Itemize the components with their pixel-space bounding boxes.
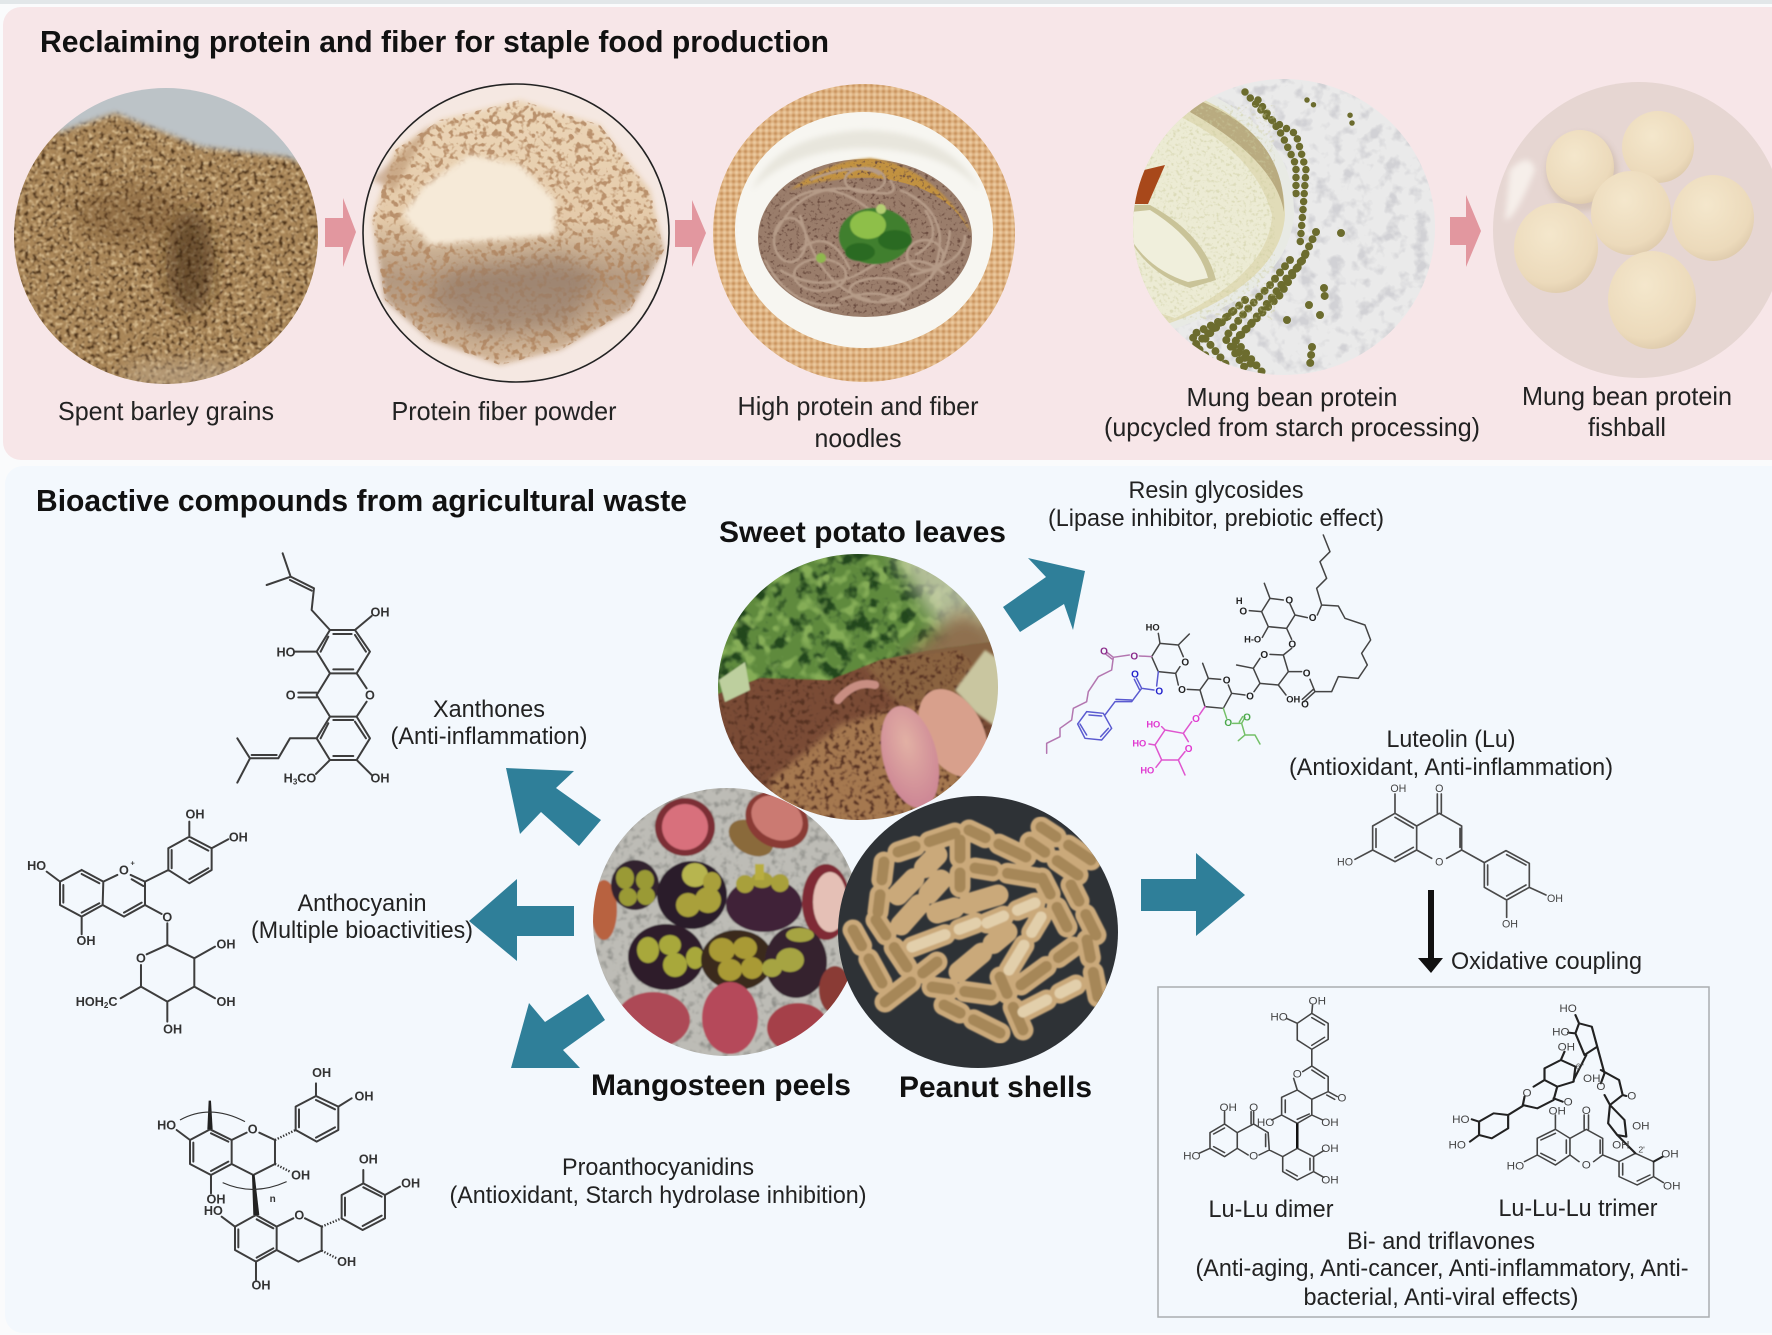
molecule: proanthocyanidin: HO: [157, 1118, 176, 1132]
molecule: resin glycoside: H-O: [1244, 635, 1261, 645]
molecule: Lu-Lu-Lu trimer: OH: [1661, 1149, 1679, 1161]
molecule: proanthocyanidin: n: [270, 1194, 276, 1205]
photo: spent barley grains: [14, 88, 318, 384]
panel: reclaiming protein and fiber: [3, 7, 1772, 460]
text: anthocyanin: (Multiple bioactivities): [251, 917, 473, 944]
molecule: anthocyanin: O: [119, 864, 129, 878]
text: proanthocyanidins: Proanthocyanidins: [562, 1154, 754, 1181]
molecule: Lu-Lu dimer: HO: [1183, 1151, 1201, 1162]
caption: fishball: fishball: [1588, 412, 1666, 442]
molecule: Lu-Lu dimer: [1183, 996, 1347, 1187]
arrow: peanut shells to luteolin: [1141, 853, 1245, 936]
text: xanthones: Xanthones: [433, 696, 545, 723]
molecule: luteolin: OH: [1502, 918, 1518, 930]
heading: bioactive compounds: Bioactive compounds from agricultural waste: [36, 483, 687, 518]
molecule: proanthocyanidin: OH: [401, 1177, 420, 1191]
molecule: luteolin: OH: [1390, 783, 1406, 795]
molecule: anthocyanin: +: [131, 858, 135, 867]
caption: mung bean protein: Mung bean protein: [1186, 382, 1398, 412]
molecule: Lu-Lu-Lu trimer: [1449, 1003, 1680, 1193]
molecule: resin glycoside: O: [1243, 712, 1251, 723]
molecule: resin glycoside: O: [1260, 650, 1268, 661]
caption: noodles: noodles: [814, 423, 902, 453]
arrow: oxidative coupling: [1418, 890, 1443, 973]
caption: spent barley grains: Spent barley grains: [58, 396, 274, 426]
molecule: Lu-Lu-Lu trimer: HO: [1552, 1027, 1570, 1038]
text: bi- and triflavones effects: Bi- and triflavones: [1347, 1228, 1535, 1255]
molecule: Lu-Lu dimer: HO: [1270, 1012, 1288, 1023]
text: luteolin: (Antioxidant, Anti-inflammation): [1289, 754, 1613, 781]
box: bi- and triflavones: [1158, 987, 1709, 1317]
molecule: Lu-Lu-Lu trimer: HO: [1507, 1161, 1524, 1172]
molecule: Lu-Lu dimer: O: [1293, 1069, 1302, 1081]
arrow: mung bean protein to fishball: [1450, 195, 1481, 267]
molecule: Lu-Lu-Lu trimer: O: [1523, 1088, 1532, 1099]
molecule: Lu-Lu-Lu trimer: OH: [1632, 1121, 1650, 1132]
molecule: resin glycoside: O: [1301, 699, 1309, 710]
arrow: barley to powder: [325, 198, 356, 267]
molecule: resin glycoside: HO: [1132, 739, 1146, 749]
caption: protein fiber powder: Protein fiber powder: [392, 396, 617, 426]
molecule: resin glycoside: O: [1155, 686, 1163, 697]
molecule: anthocyanin: OH: [163, 1022, 182, 1036]
photo: mung bean protein fishball: [1490, 80, 1772, 380]
caption: noodles: High protein and fiber: [738, 391, 979, 421]
label: Lu-Lu-Lu trimer: Lu-Lu-Lu trimer: [1498, 1195, 1658, 1222]
molecule: proanthocyanidin: OH: [312, 1066, 331, 1080]
molecule: resin glycoside: HO: [1146, 719, 1160, 729]
molecule: resin glycoside: O: [1192, 714, 1200, 725]
molecule: Lu-Lu dimer: OH: [1309, 996, 1326, 1007]
molecule: resin glycoside: H: [1236, 596, 1243, 606]
molecule: Lu-Lu-Lu trimer: O: [1582, 1105, 1591, 1117]
molecule: proanthocyanidin: O: [248, 1123, 258, 1137]
molecule: proanthocyanidin: OH: [206, 1193, 225, 1207]
molecule: Lu-Lu dimer: OH: [1321, 1117, 1339, 1129]
molecule: resin glycoside: O: [1246, 691, 1254, 702]
molecule: resin glycoside: O: [1130, 651, 1138, 662]
molecule: resin glycoside: HO: [1146, 622, 1160, 632]
molecule: anthocyanin: [27, 807, 248, 1036]
molecule: anthocyanin: HO: [27, 859, 46, 873]
molecule: anthocyanin: OH: [216, 995, 235, 1009]
panel: bioactive compounds: [5, 466, 1772, 1333]
text: bi- and triflavones effects: bacterial, Anti-viral effects): [1304, 1284, 1578, 1311]
molecule: Lu-Lu-Lu trimer: OH: [1612, 1140, 1630, 1152]
text: oxidative coupling: Oxidative coupling: [1451, 948, 1642, 975]
molecule: Lu-Lu dimer: OH: [1219, 1102, 1237, 1114]
photo: high protein and fiber noodles: [710, 80, 1020, 386]
heading: reclaiming protein: Reclaiming protein and fiber for staple food production: [40, 24, 829, 59]
molecule: proanthocyanidin: OH: [291, 1168, 310, 1182]
molecule: resin glycoside: O: [1309, 613, 1317, 624]
molecule: Lu-Lu-Lu trimer: O: [1582, 1160, 1591, 1172]
molecule: anthocyanin: 2: [104, 1001, 109, 1010]
molecule: Lu-Lu-Lu trimer: OH: [1549, 1106, 1566, 1117]
molecule: resin glycoside: O: [1224, 718, 1232, 729]
molecule: Lu-Lu dimer: O: [1249, 1151, 1258, 1162]
molecule: Lu-Lu-Lu trimer: OH: [1663, 1181, 1680, 1193]
molecule: Lu-Lu dimer: OH: [1321, 1143, 1339, 1155]
molecule: xanthone: H: [284, 772, 293, 786]
molecule: xanthone: OH: [370, 606, 389, 620]
molecule: resin glycoside: O: [1100, 646, 1108, 657]
molecule: resin glycoside: O: [1131, 670, 1139, 681]
molecule: resin glycoside: O: [1239, 606, 1247, 617]
arrow: powder to noodles: [675, 200, 706, 267]
molecule: resin glycoside: O: [1178, 685, 1186, 696]
molecule: Lu-Lu-Lu trimer: O: [1627, 1091, 1637, 1103]
molecule: proanthocyanidin: OH: [337, 1255, 356, 1269]
label: peanut shells: Peanut shells: [899, 1071, 1092, 1104]
molecule: Lu-Lu-Lu trimer: HO: [1452, 1114, 1470, 1126]
molecule: Lu-Lu dimer: HO: [1257, 1117, 1275, 1129]
photo: sweet potato leaves: [715, 550, 1002, 830]
molecule: resin glycoside: O: [1285, 596, 1293, 607]
molecule: resin glycoside: HO: [1140, 765, 1154, 775]
molecule: proanthocyanidin: HO: [204, 1204, 223, 1218]
molecule: Lu-Lu dimer: O: [1337, 1093, 1347, 1104]
heading: sweet potato leaves: Sweet potato leaves: [719, 516, 1006, 549]
label: Lu-Lu dimer: Lu-Lu dimer: [1208, 1196, 1334, 1223]
photo: mangosteen peels: [590, 780, 865, 1060]
arrow: mangosteen to proanthocyanidins: [511, 994, 605, 1068]
molecule: Lu-Lu-Lu trimer: O: [1564, 1097, 1573, 1108]
molecule: resin glycoside: O: [1223, 676, 1231, 687]
molecule: resin glycoside: O: [1288, 640, 1296, 651]
molecule: xanthone: 3: [293, 778, 298, 787]
molecule: resin glycoside: [1047, 535, 1371, 775]
molecule: proanthocyanidin: O: [294, 1208, 304, 1222]
molecule: luteolin: O: [1435, 856, 1443, 868]
molecule: Lu-Lu-Lu trimer: HO: [1449, 1140, 1466, 1152]
molecule: anthocyanin: O: [162, 911, 172, 925]
text: proanthocyanidins: (Antioxidant, Starch hydrolase inhibition): [450, 1182, 866, 1209]
molecule: xanthone: O: [286, 688, 296, 702]
molecule: anthocyanin: C: [108, 995, 118, 1009]
molecule: anthocyanin: OH: [216, 938, 235, 952]
text: luteolin: Luteolin (Lu): [1386, 726, 1516, 753]
text: resin glycosides: (Lipase inhibitor, prebiotic effect): [1048, 505, 1384, 532]
molecule: xanthone: O: [365, 688, 375, 702]
molecule: resin glycoside: O: [1303, 669, 1311, 680]
molecule: Lu-Lu-Lu trimer: OH: [1558, 1042, 1575, 1053]
molecule: proanthocyanidin: OH: [354, 1089, 373, 1103]
label: mangosteen peels: Mangosteen peels: [591, 1069, 851, 1102]
molecule: resin glycoside: O: [1185, 744, 1193, 755]
text: xanthones: (Anti-inflammation): [390, 723, 588, 750]
molecule: luteolin: [1337, 783, 1563, 930]
text: bi- and triflavones effects: (Anti-aging, Anti-cancer, Anti-inflammatory, Anti-: [1196, 1255, 1688, 1282]
photo: mung bean protein: [1120, 76, 1440, 380]
molecule: anthocyanin: HOH: [76, 995, 104, 1009]
molecule: xanthone: OH: [370, 771, 389, 785]
molecule: proanthocyanidin: [157, 1066, 420, 1292]
arrow: sweet potato to resin glycosides: [1003, 558, 1085, 632]
molecule: Lu-Lu-Lu trimer: OH: [1583, 1073, 1600, 1085]
molecule: Lu-Lu-Lu trimer: O: [1596, 1081, 1606, 1093]
molecule: anthocyanin: OH: [76, 934, 95, 948]
molecule: xanthone: [237, 553, 389, 787]
molecule: Lu-Lu-Lu trimer: 2': [1638, 1145, 1645, 1155]
molecule: xanthone: HO: [276, 646, 296, 660]
caption: fishball: Mung bean protein: [1522, 381, 1732, 411]
molecule: luteolin: O: [1435, 783, 1443, 795]
photo: protein fiber powder: [360, 84, 672, 384]
text: anthocyanin: Anthocyanin: [298, 890, 426, 917]
arrow: mangosteen to anthocyanin: [469, 879, 574, 961]
molecule: luteolin: OH: [1547, 893, 1563, 905]
molecule: anthocyanin: OH: [229, 831, 248, 845]
molecule: anthocyanin: O: [136, 952, 146, 966]
caption: mung bean protein: (upcycled from starch processing): [1104, 412, 1480, 442]
molecule: luteolin: HO: [1337, 856, 1353, 868]
molecule: proanthocyanidin: OH: [251, 1278, 270, 1292]
molecule: xanthone: CO: [297, 772, 316, 786]
molecule: Lu-Lu dimer: OH: [1321, 1175, 1339, 1187]
molecule: anthocyanin: OH: [185, 807, 204, 821]
molecule: Lu-Lu dimer: O: [1249, 1102, 1258, 1114]
molecule: Lu-Lu-Lu trimer: HO: [1559, 1003, 1577, 1015]
arrow: mangosteen to xanthones: [506, 768, 601, 846]
photo: peanut shells: [835, 792, 1121, 1072]
molecule: Lu-Lu-Lu trimer: 6": [1576, 1062, 1584, 1071]
molecule: resin glycoside: OH: [1286, 694, 1301, 704]
molecule: resin glycoside: O: [1181, 657, 1189, 668]
molecule: proanthocyanidin: OH: [359, 1153, 378, 1167]
text: resin glycosides: Resin glycosides: [1128, 477, 1304, 504]
